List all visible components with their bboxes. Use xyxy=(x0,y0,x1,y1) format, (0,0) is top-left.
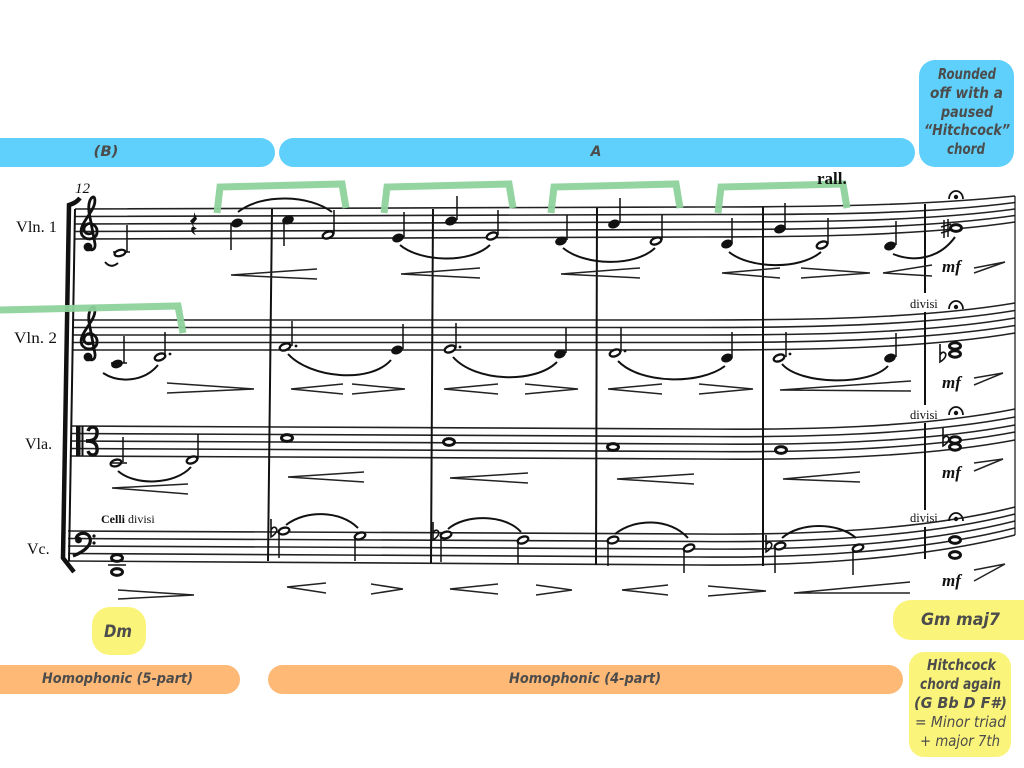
fermatas xyxy=(949,191,963,521)
clef: treble violin 1 xyxy=(81,197,97,250)
callout: Hitchcock chord note: “Hitchcock” xyxy=(924,121,1010,139)
chord label: Gm maj7: Gm maj7 xyxy=(921,610,1000,630)
score text markings: divisi xyxy=(910,511,938,525)
score text markings: divisi xyxy=(910,408,938,422)
music score xyxy=(14,181,1015,599)
callout: Hitchcock chord note: Rounded xyxy=(938,65,996,83)
texture bar: homophonic 4-part: Homophonic (4-part) xyxy=(509,671,661,687)
green phrase brackets xyxy=(0,184,847,333)
callout: Hitchcock chord note: off with a xyxy=(930,84,1003,102)
blue section bar: B: (B) xyxy=(94,144,118,160)
score text markings xyxy=(101,297,938,526)
texture bar: homophonic 4-part xyxy=(268,665,903,694)
blue section bar: B xyxy=(0,138,275,167)
dynamic markings mf: mf xyxy=(942,257,963,276)
clef: alto viola xyxy=(76,426,97,456)
callout: Hitchcock chord note: paused xyxy=(940,103,993,121)
chord label: Dm: Dm xyxy=(104,622,132,642)
tempo marking: rall.: rall. xyxy=(817,169,847,188)
callout: Hitchcock chord explanation: Hitchcock xyxy=(927,656,997,674)
system bracket xyxy=(63,198,80,572)
dynamics hairpins xyxy=(112,262,1005,599)
instrument labels xyxy=(14,219,57,558)
callout: Hitchcock chord note xyxy=(919,60,1014,167)
score text markings: Celli divisi xyxy=(101,512,155,526)
instrument labels: Vln. 2 xyxy=(14,330,57,347)
measure number: 12 xyxy=(75,181,90,197)
notes: violin 2 xyxy=(103,321,960,380)
staff: violin 2 xyxy=(73,303,1015,350)
callout: Hitchcock chord explanation: + major 7th xyxy=(920,732,1000,750)
texture bar: homophonic 5-part: Homophonic (5-part) xyxy=(42,671,193,687)
blue section bar: A: A xyxy=(590,144,601,160)
instrument labels: Vc. xyxy=(27,541,50,558)
dynamic markings mf xyxy=(942,257,963,590)
staff: cello xyxy=(68,507,1015,565)
instrument labels: Vla. xyxy=(25,436,52,453)
score text markings: divisi xyxy=(910,297,938,311)
callout: Hitchcock chord explanation xyxy=(909,652,1011,757)
dynamic markings mf: mf xyxy=(942,463,963,482)
notes: violin 1 xyxy=(105,196,962,266)
clef: treble violin 2 xyxy=(81,307,97,360)
blue section bar: A xyxy=(279,138,915,167)
callout: Hitchcock chord explanation: chord again xyxy=(920,675,1001,693)
barlines xyxy=(69,196,1015,566)
notes: cello xyxy=(108,514,960,575)
chord label: Gm maj7 xyxy=(893,600,1024,640)
dynamic markings mf: mf xyxy=(942,373,963,392)
staff: violin 1 xyxy=(75,196,1015,239)
staff: viola xyxy=(71,409,1015,459)
chord label: Dm xyxy=(92,607,146,655)
clef: bass cello xyxy=(73,533,96,556)
callout: Hitchcock chord explanation: = Minor triad xyxy=(915,713,1006,731)
callout: Hitchcock chord note: chord xyxy=(947,140,985,158)
instrument labels: Vln. 1 xyxy=(16,219,57,236)
notes: viola xyxy=(110,428,960,481)
dynamic markings mf: mf xyxy=(942,571,963,590)
texture bar: homophonic 5-part xyxy=(0,665,240,694)
callout: Hitchcock chord explanation: (G Bb D F#) xyxy=(914,694,1007,712)
